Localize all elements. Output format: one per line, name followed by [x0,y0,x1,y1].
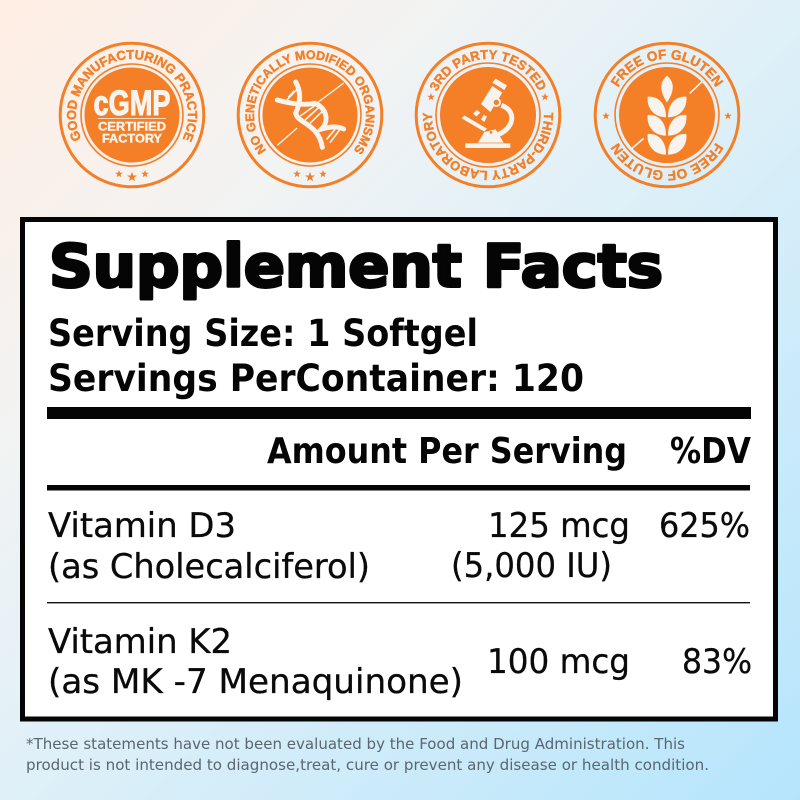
row: vitamin K2: 83% [682,642,752,682]
badge: cGMP certified factory [58,42,206,188]
serving info [48,312,584,400]
stars [293,170,327,181]
row: vitamin K2: 100 mcg [487,642,630,682]
serving info: Serving Size: 1 Softgel [48,312,478,355]
badge text: no genetically modified organisms: NO GENETICALLY MODIFIED ORGANISMS [245,50,375,155]
row: vitamin D3: Vitamin D3 [48,506,236,546]
stars [427,93,549,100]
row: vitamin D3: (5,000 IU) [451,546,612,586]
stars [115,170,149,181]
footnote: product is not intended to diagnose,treat, cure or prevent any disease or health condition. [26,756,709,774]
cGMP logo text: cGMP [94,84,170,123]
row: vitamin D3 [48,506,750,587]
badge text: free of gluten bottom: FREE OF GLUTEN [610,142,724,181]
stars [602,112,732,119]
badge text: good manufacturing practice: GOOD MANUFACTURING PRACTICE [66,50,198,142]
badge text: free of gluten top: FREE OF GLUTEN [610,49,724,88]
badge text: 3rd party tested: 3RD PARTY TESTED [430,50,546,91]
badge: third-party tested [414,42,562,188]
certified factory text: CERTIFIED [98,122,166,134]
row: vitamin D3: 625% [659,506,750,546]
badge text: third-party laboratory: THIRD-PARTY LABORATORY [422,112,554,180]
badge: gluten free [594,42,740,188]
footnote [26,735,709,774]
footnote: *These statements have not been evaluated by the Food and Drug Administration. This [26,735,685,753]
title: Supplement Facts [49,232,663,300]
row: vitamin K2: (as MK -7 Menaquinone) [48,662,463,702]
icon: microscope [462,79,512,148]
row: vitamin K2: Vitamin K2 [48,622,232,662]
row: vitamin D3: (as Cholecalciferol) [48,547,370,587]
certified factory text: FACTORY [102,134,162,146]
row: vitamin K2 [48,622,752,702]
certified factory text [98,122,166,146]
badge: no GMO [236,42,384,188]
panel: supplement facts [22,220,776,719]
icon: wheat with slash [632,76,702,155]
row: vitamin D3: 125 mcg [488,506,630,546]
column headers: Amount Per Serving [267,431,627,472]
icon: DNA helix with slash [277,82,344,147]
column headers: %DV [670,431,751,472]
serving info: Servings PerContainer: 120 [48,357,584,400]
